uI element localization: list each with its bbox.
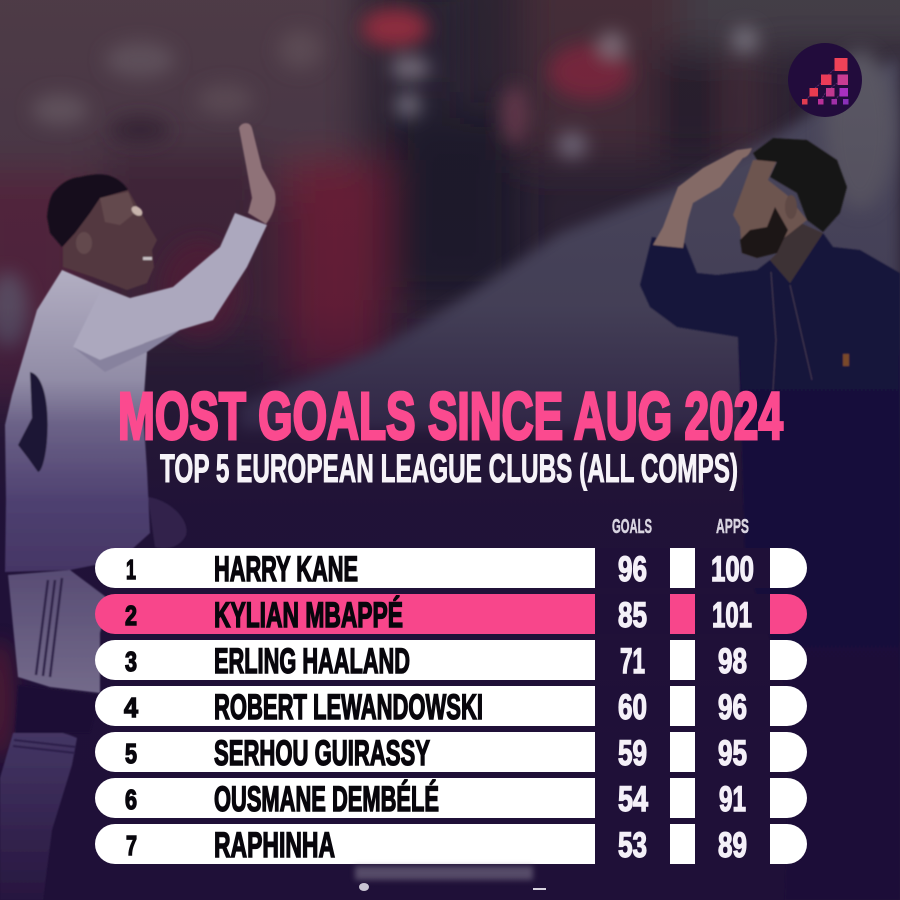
row 1: 96 — [618, 550, 647, 589]
row 5: 5 — [125, 738, 137, 769]
row 5: SERHOU GUIRASSY — [214, 734, 430, 773]
face — [733, 160, 807, 258]
blurred watermark — [355, 866, 546, 891]
shorts — [8, 570, 110, 693]
torso — [5, 270, 150, 572]
right figure: coach — [640, 138, 900, 900]
sock bands — [13, 740, 76, 753]
row 7: 89 — [718, 826, 747, 865]
teeth — [143, 257, 152, 260]
row 4: ROBERT LEWANDOWSKI — [214, 688, 483, 727]
row 1 — [95, 548, 807, 589]
row 7 — [95, 824, 807, 865]
row 4: 96 — [718, 688, 747, 727]
hand — [239, 123, 276, 224]
left player: Mbappé — [0, 123, 276, 900]
column header: apps: APPS — [716, 516, 749, 538]
row 6 — [95, 778, 807, 819]
row 6: 54 — [618, 780, 648, 819]
row 4: 4 — [124, 692, 138, 723]
row 7: 7 — [126, 830, 137, 861]
arm and hand — [653, 148, 752, 248]
row 2 highlighted: 2 — [125, 600, 137, 631]
jersey number dark — [18, 372, 48, 472]
logo badge — [788, 43, 862, 117]
row 2 highlighted: 85 — [618, 596, 647, 635]
beard — [740, 207, 788, 258]
sock — [0, 730, 77, 900]
row 7: 53 — [618, 826, 647, 865]
chest logo — [843, 354, 849, 366]
ear — [76, 232, 92, 254]
row 2 highlighted — [95, 594, 807, 635]
jacket body — [640, 233, 900, 900]
zipper — [771, 272, 812, 390]
row 6: OUSMANE DEMBÉLÉ — [214, 779, 439, 819]
table — [95, 548, 807, 865]
hair — [753, 138, 847, 232]
row 5 — [95, 732, 807, 773]
hair — [47, 174, 128, 247]
row 3: 71 — [620, 642, 645, 681]
row 1: 1 — [126, 554, 136, 585]
row 5: 95 — [718, 734, 747, 773]
row 6: 6 — [125, 784, 137, 815]
row 3 — [95, 640, 807, 681]
leg shadow — [15, 685, 100, 733]
row 7: RAPHINHA — [214, 826, 335, 865]
row 1: 100 — [711, 550, 754, 589]
row 5: 59 — [618, 734, 647, 773]
bandage — [130, 204, 144, 218]
row 3: ERLING HAALAND — [214, 642, 410, 681]
face — [63, 190, 157, 290]
supporting hand — [148, 497, 187, 548]
row 4 — [95, 686, 807, 727]
neck — [770, 217, 823, 283]
column header: goals: GOALS — [612, 516, 652, 538]
row 2 highlighted: KYLIAN MBAPPÉ — [214, 595, 403, 635]
background: diagonal stand — [240, 55, 900, 430]
row 4: 60 — [618, 688, 647, 727]
ear — [785, 195, 797, 219]
cheek highlight — [100, 192, 136, 225]
raised sleeve — [73, 213, 267, 360]
background: grey corner — [825, 50, 895, 210]
row 3: 98 — [718, 642, 747, 681]
sleeve shadow — [73, 330, 180, 372]
row 3: 3 — [125, 646, 137, 677]
row 6: 91 — [719, 780, 746, 819]
row 1: HARRY KANE — [214, 550, 358, 589]
shorts stripes — [36, 578, 62, 677]
row 2 highlighted: 101 — [712, 596, 752, 635]
